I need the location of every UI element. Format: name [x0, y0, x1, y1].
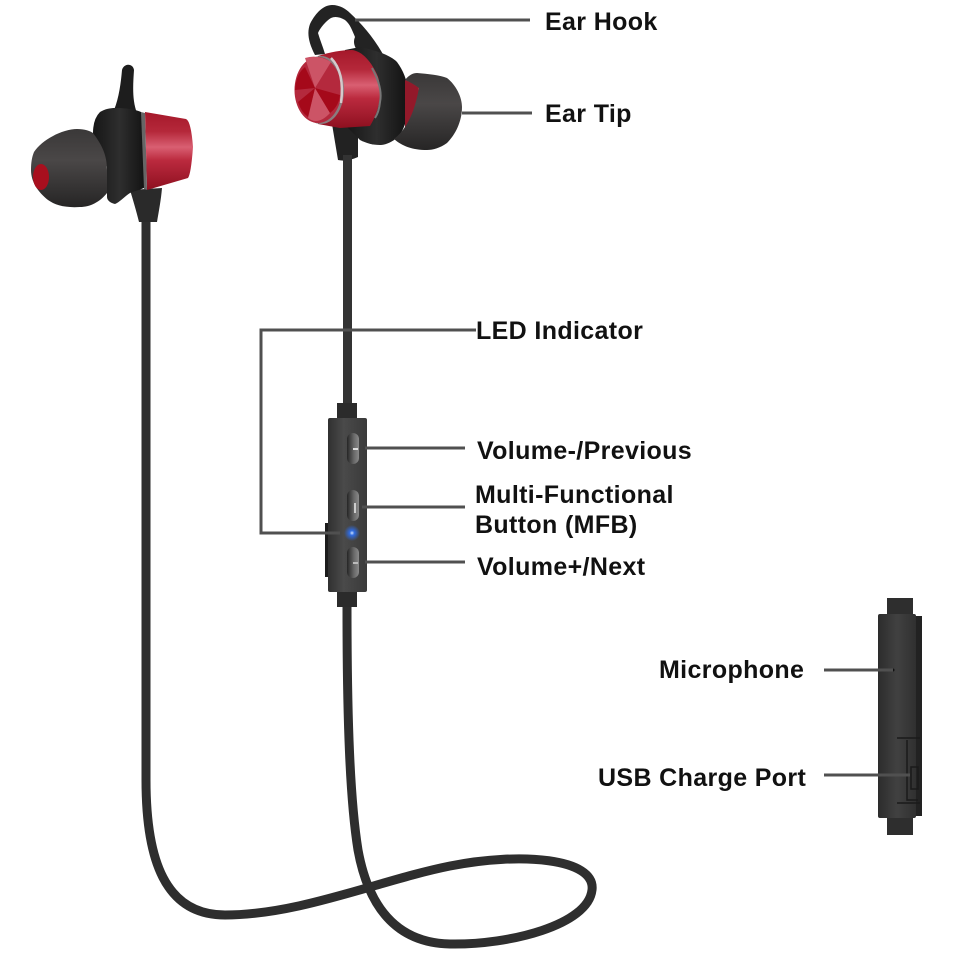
right housing metal edge: [372, 68, 381, 118]
right earbud: [294, 5, 462, 161]
right ear hook: [308, 5, 384, 56]
right face disc: [294, 56, 344, 124]
detail controller: [878, 598, 922, 835]
face light wedges: [305, 57, 331, 121]
face dark wedges: [295, 67, 340, 117]
LED glow: [344, 525, 360, 541]
label: Microphone: Microphone: [659, 656, 804, 684]
volume minus button: [347, 433, 359, 464]
left earbud: [31, 65, 193, 222]
leader: MFB: [362, 506, 465, 508]
controller necks: [337, 403, 357, 607]
detail necks: [887, 598, 913, 835]
mic hole: [892, 668, 894, 672]
face silver ring: [331, 58, 342, 103]
side switch: [325, 523, 329, 577]
right black body: [345, 47, 409, 145]
right red housing: [318, 50, 380, 128]
leader: ear tip: [462, 112, 532, 114]
leader: USB: [824, 774, 910, 776]
left stem: [130, 188, 162, 222]
inline controller: [325, 403, 367, 607]
label: Volume+/Next: Volume+/Next: [477, 553, 646, 581]
label: Ear Tip: Ear Tip: [545, 100, 632, 128]
controller body: [328, 418, 367, 592]
left ear tip: [31, 129, 107, 207]
neckband cable: [146, 220, 592, 944]
leader: volume plus: [365, 560, 465, 564]
label: USB Charge Port: USB Charge Port: [598, 764, 807, 792]
label: Ear Hook: Ear Hook: [545, 8, 658, 36]
label: Multi-Functional Button: [475, 481, 674, 539]
leader: microphone: [824, 668, 893, 672]
right ear tip: [394, 73, 462, 150]
leader lines: [261, 20, 910, 775]
MFB button: [347, 490, 359, 521]
USB port: [897, 738, 920, 803]
label: Volume-/Previous: Volume-/Previous: [477, 437, 692, 465]
right ear tip red inner: [405, 80, 419, 128]
right stem: [332, 124, 358, 161]
leader: volume minus: [365, 446, 465, 450]
leader: LED: [261, 330, 476, 533]
volume plus button: [347, 547, 359, 578]
left ear tip opening: [33, 164, 49, 190]
left ear hook fin: [114, 65, 137, 113]
upper cable to controller: [343, 155, 352, 405]
left metal ring: [141, 112, 147, 190]
left red housing: [145, 112, 193, 190]
detail body: [878, 614, 916, 818]
label: LED Indicator: LED Indicator: [476, 317, 643, 345]
label: Multi-Functional Button: Multi-Functional: [475, 481, 674, 509]
label: Multi-Functional Button: Button (MFB): [475, 511, 638, 539]
leader: ear hook: [355, 18, 530, 22]
left black body: [93, 108, 146, 204]
detail side strip: [915, 616, 922, 816]
